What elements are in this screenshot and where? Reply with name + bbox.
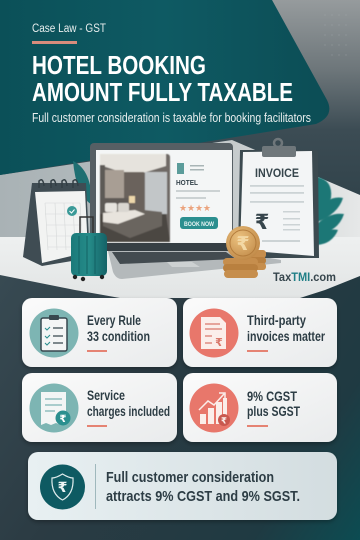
icon: checklist clipboard xyxy=(30,308,78,358)
card text: Every Rule xyxy=(87,313,141,328)
laptop xyxy=(90,143,281,279)
icon: leaf behind laptop xyxy=(73,161,92,205)
panel: Third-party invoices matter xyxy=(183,298,337,367)
dot pattern xyxy=(324,14,347,56)
hotel listing panel xyxy=(176,163,220,229)
callout: conclusion xyxy=(28,452,337,520)
title: AMOUNT FULLY TAXABLE xyxy=(32,77,293,107)
logo: TaxTMI.com: TaxTMI.com xyxy=(273,270,336,284)
card text: Service xyxy=(87,388,125,403)
icon: receipt with rupee xyxy=(30,384,78,432)
icon: rising bar chart xyxy=(190,384,238,432)
icon: desk calendar xyxy=(23,180,90,266)
icon: rupee coins xyxy=(223,226,266,278)
panel: Every Rule 33 condition xyxy=(22,298,177,367)
card text: 9% CGST xyxy=(247,389,298,404)
icon: rupee shield xyxy=(40,464,85,510)
hotel room photo xyxy=(100,154,170,242)
hotel listing panel: HOTEL xyxy=(176,178,198,187)
title xyxy=(32,50,293,107)
accent rule xyxy=(32,41,77,44)
card text xyxy=(247,313,326,344)
icon: rupee shield: ₹ xyxy=(58,480,68,496)
card text xyxy=(87,388,170,419)
card text: invoices matter xyxy=(247,329,326,344)
icon: rupee coins: ₹ xyxy=(236,233,250,255)
invoice clipboard xyxy=(238,139,319,258)
card text: plus SGST xyxy=(247,404,301,419)
callout text: Full customer consideration xyxy=(106,469,274,486)
eyebrow label: Case Law - GST xyxy=(32,23,106,35)
illustration backdrop: wall and table xyxy=(0,140,360,298)
panel: Service charges included xyxy=(22,373,177,442)
icon: rising bar chart: ₹ xyxy=(221,416,227,426)
icon: invoice document: ₹ xyxy=(215,336,223,349)
icon: suitcase xyxy=(71,217,107,281)
subtitle: Full customer consideration is taxable for booking facilitators xyxy=(32,111,311,125)
card text: 33 condition xyxy=(87,329,150,344)
panel: 9% CGST plus SGST xyxy=(183,373,337,442)
icon: right leaves xyxy=(317,177,344,245)
hotel listing panel: BOOK NOW xyxy=(184,221,215,228)
title: HOTEL BOOKING xyxy=(32,50,206,80)
callout text xyxy=(106,469,300,505)
icon: receipt with rupee: ₹ xyxy=(60,414,67,425)
teal header shape xyxy=(0,0,329,175)
card text xyxy=(247,389,301,419)
callout text: attracts 9% CGST and 9% SGST. xyxy=(106,488,300,505)
card text: Third-party xyxy=(247,313,306,328)
card text xyxy=(87,313,150,344)
icon: invoice document xyxy=(190,308,238,358)
rupee symbol: ₹ xyxy=(255,210,269,234)
hotel listing panel: ★★★★ xyxy=(179,204,211,214)
card text: charges included xyxy=(87,404,170,419)
invoice heading: INVOICE xyxy=(255,168,299,180)
